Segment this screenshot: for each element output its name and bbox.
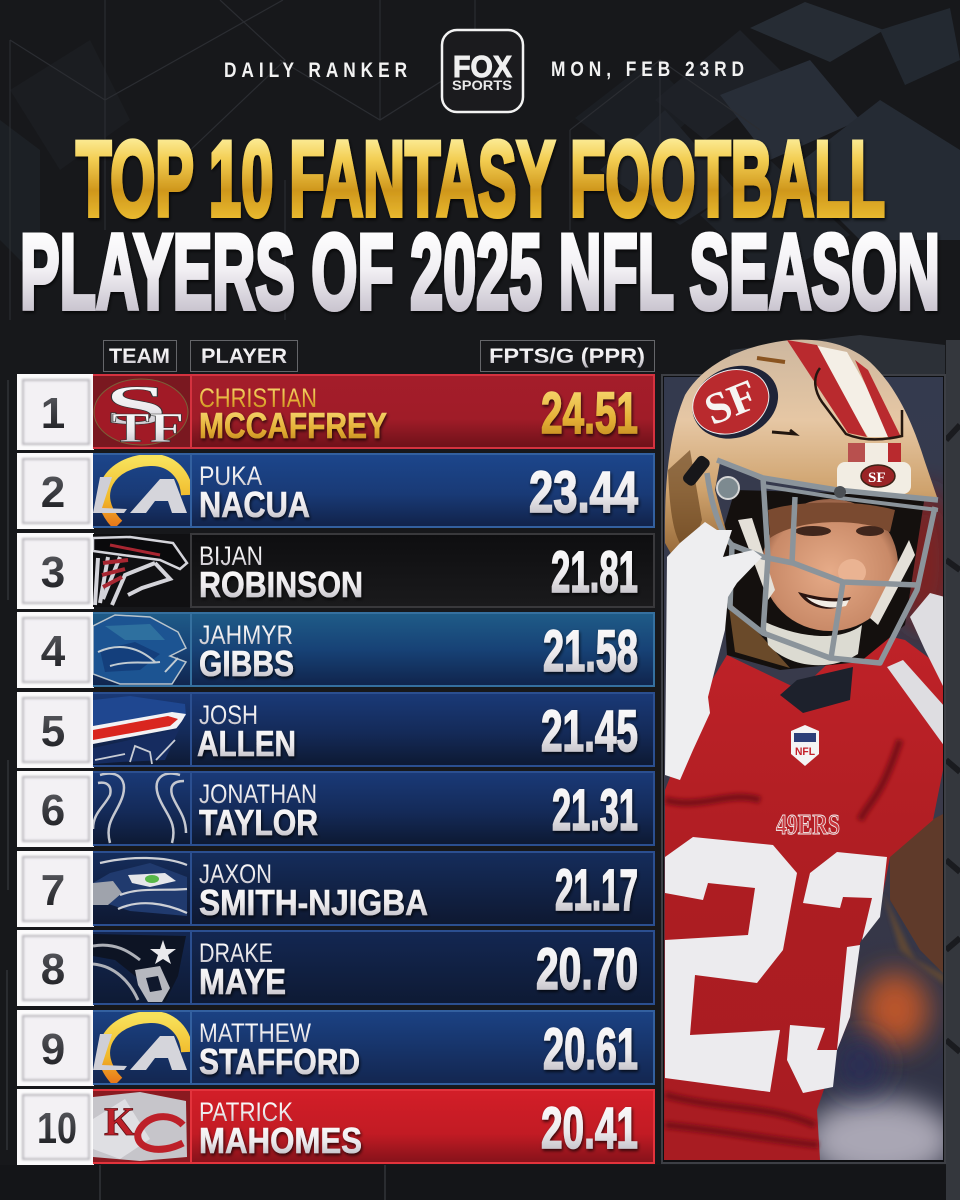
NFL shield [791, 725, 819, 766]
rank box [17, 453, 94, 529]
score: 24.51 [541, 381, 638, 446]
score: 21.31 [552, 778, 638, 843]
player cell: MAYE [199, 961, 286, 1002]
row 4 [17, 612, 654, 688]
player cell: ROBINSON [199, 564, 363, 605]
rank box: 9 [41, 1025, 65, 1074]
team logo: Patriots [93, 930, 190, 1005]
rank box: 1 [41, 389, 65, 438]
score: 21.81 [551, 540, 638, 605]
team logo: Rams [93, 453, 190, 528]
team logo: Colts [93, 771, 190, 846]
rank box [17, 692, 94, 768]
row 1 [17, 374, 654, 452]
rank box: 4 [41, 627, 66, 676]
jersey number 2 [665, 837, 797, 1092]
player cell: MATTHEW [199, 1018, 311, 1048]
player cell [93, 1010, 654, 1085]
rank box [17, 1010, 94, 1086]
photo panel: Christian McCaffrey [662, 340, 955, 1182]
facemask [707, 460, 938, 663]
team logo: 49ers [93, 374, 190, 452]
score: 21.17 [555, 858, 638, 923]
helmet bumper: SF [868, 470, 886, 486]
face [762, 499, 898, 631]
rank box [17, 612, 94, 688]
score: 21.45 [541, 699, 638, 764]
row 3 [17, 533, 654, 609]
team logo: 49ers: S [105, 375, 167, 437]
helmet decal: SF [692, 366, 778, 439]
rank box [17, 1089, 94, 1165]
rank box: 8 [41, 945, 65, 994]
jersey number 3 [787, 852, 887, 1093]
rank box [17, 930, 94, 1006]
row 7 [17, 851, 654, 927]
player cell: JAHMYR [199, 620, 293, 650]
player cell: TAYLOR [199, 802, 318, 843]
player cell: SMITH-NJIGBA [199, 882, 428, 923]
column tag: player: PLAYER [201, 345, 287, 368]
player cell [93, 612, 654, 687]
player cell: NACUA [199, 484, 310, 525]
right glove [887, 593, 945, 747]
helmet shell [665, 340, 938, 570]
rank box: 5 [41, 707, 65, 756]
player cell [93, 1089, 654, 1164]
column tag: team [104, 340, 176, 372]
row 9 [17, 1010, 654, 1086]
rank box [17, 771, 94, 847]
player cell [93, 453, 654, 528]
helmet bumper [837, 462, 911, 494]
team logo: 49ers: TF [112, 406, 184, 452]
player cell: PATRICK [199, 1097, 293, 1127]
player cell: GIBBS [199, 643, 294, 684]
team logo: Seahawks [93, 851, 190, 926]
header: FOX Sports logo: SPORTS [452, 78, 512, 93]
player cell: ALLEN [197, 723, 296, 764]
team logo: Bills [93, 692, 190, 767]
score: 20.61 [543, 1017, 638, 1082]
row 2 [17, 453, 654, 529]
player cell [191, 534, 654, 607]
player cell [93, 692, 654, 767]
player cell: PUKA [199, 461, 262, 491]
score: 21.58 [543, 619, 638, 684]
header: FOX Sports logo: FOX [453, 49, 512, 84]
rank box: 10 [37, 1104, 77, 1153]
helmet stripes [757, 340, 902, 462]
rank box: 3 [41, 548, 65, 597]
left glove [665, 522, 762, 780]
rank box: 6 [41, 786, 65, 835]
player cell: STAFFORD [199, 1041, 360, 1082]
row 10 [17, 1089, 654, 1165]
rank box: 7 [41, 866, 65, 915]
header: FOX Sports logo [442, 30, 523, 112]
team logo: Rams [93, 1010, 190, 1085]
score: 23.44 [529, 460, 638, 525]
player cell: MAHOMES [199, 1120, 362, 1161]
player arm [890, 813, 945, 975]
chin strap [765, 622, 862, 665]
column tag: fantasy points per game: FPTS/G (PPR) [489, 345, 645, 368]
column tag: team: TEAM [109, 345, 170, 368]
rank box: 2 [41, 468, 65, 517]
player cell: MCCAFFREY [199, 405, 387, 446]
team logo: Falcons [93, 533, 190, 608]
header: daily ranker label: DAILY RANKER [224, 59, 412, 82]
helmet decal: SF: SF [698, 370, 764, 435]
player cell: JAXON [199, 859, 272, 889]
jersey [664, 630, 945, 1160]
player cell: DRAKE [199, 938, 273, 968]
column tag: player [190, 340, 298, 372]
collar [780, 667, 853, 713]
rank box [17, 851, 94, 927]
team logo: Chiefs: K [104, 1099, 135, 1144]
row 8 [17, 930, 654, 1006]
rank box [17, 374, 94, 450]
rank box [17, 533, 94, 609]
header: date: MON, FEB 23RD [551, 58, 749, 81]
score: 20.70 [536, 937, 638, 1002]
jersey wordmark: 49ERS [776, 809, 840, 841]
team logo: Chiefs [93, 1089, 190, 1164]
player cell: JOSH [199, 700, 258, 730]
helmet interior [720, 490, 925, 670]
player cell: JONATHAN [199, 779, 317, 809]
score: 20.41 [541, 1096, 638, 1161]
player cell [93, 851, 654, 926]
row 5 [17, 692, 654, 768]
player cell: BIJAN [199, 541, 263, 571]
row 6 [17, 771, 654, 847]
player cell [93, 771, 654, 846]
column tag: fantasy points per game [480, 340, 654, 372]
NFL shield: NFL [795, 746, 815, 758]
player cell [93, 930, 654, 1005]
player cell [93, 374, 654, 449]
player cell: CHRISTIAN [199, 383, 317, 413]
team logo: Lions [93, 612, 190, 687]
